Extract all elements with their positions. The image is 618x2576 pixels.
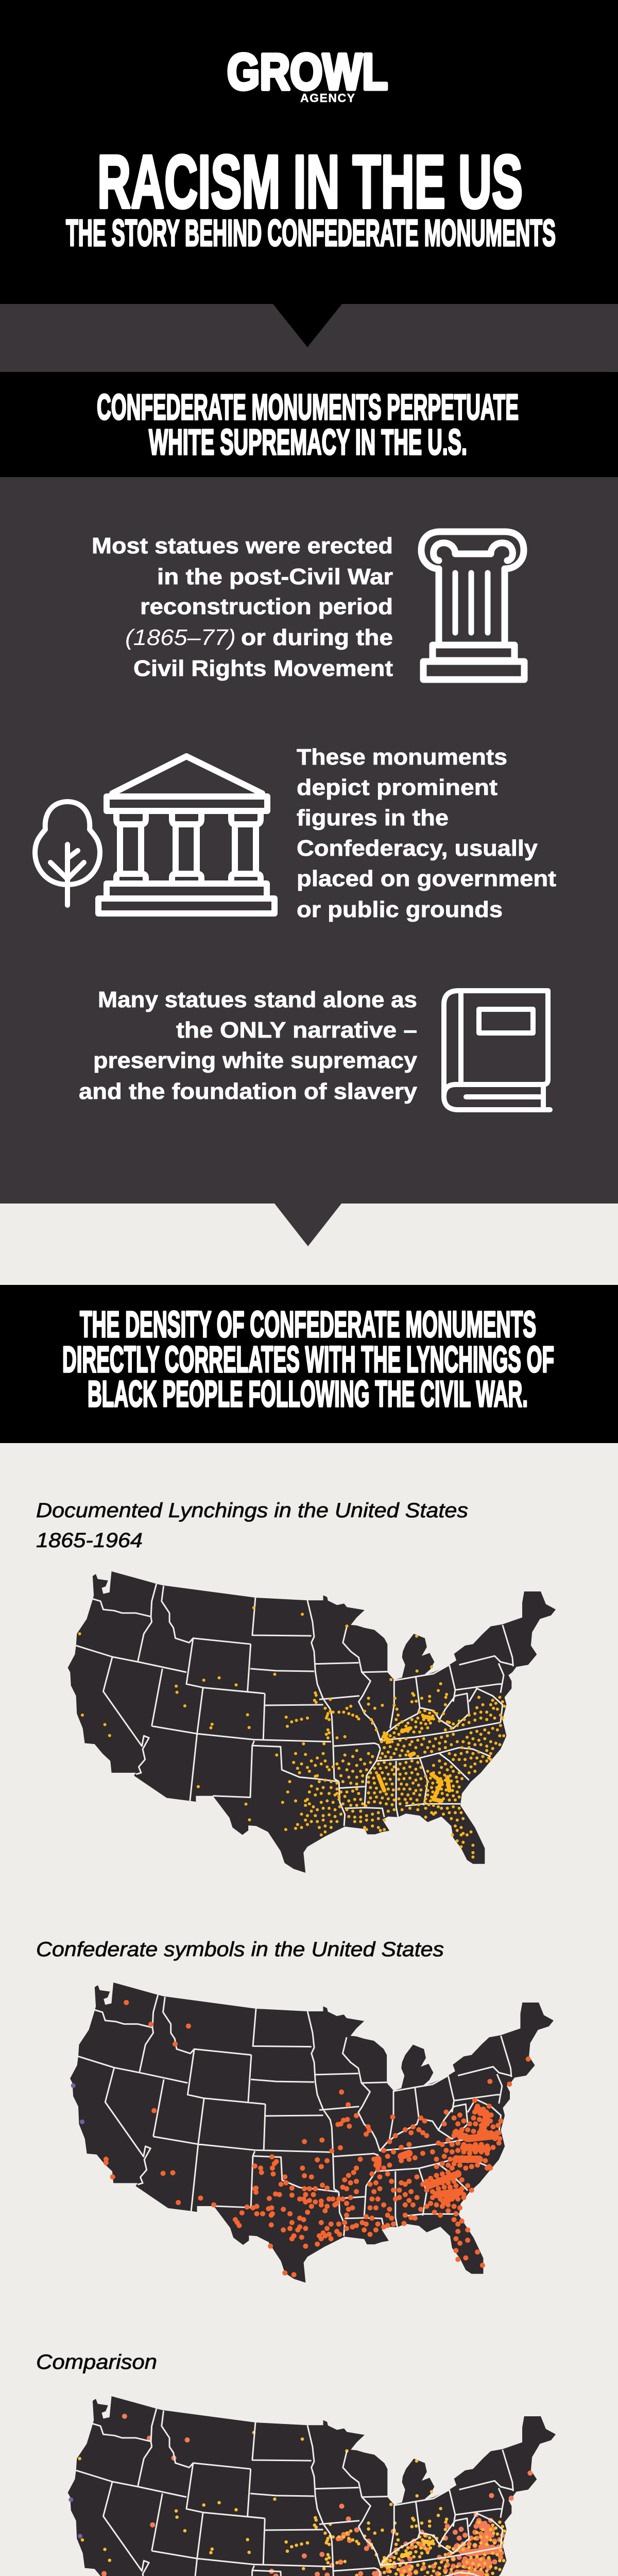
map: confederate symbols <box>70 1982 554 2283</box>
band: grey strip under header <box>0 304 618 372</box>
arrow: header pointer <box>273 304 342 347</box>
text: prominent figures: Confederacy, usually <box>297 836 538 861</box>
text: prominent figures: These monuments <box>297 744 507 770</box>
text: when statues were erected: in the post-Civil War <box>157 564 393 589</box>
text: prominent figures <box>297 744 556 922</box>
caption: lynchings map: 1865-1964 <box>36 1529 143 1552</box>
text: when statues were erected: (1865–77) <box>125 625 236 650</box>
text: prominent figures: or public grounds <box>297 897 503 922</box>
panel: heading, confederate monuments <box>0 372 618 477</box>
panel: header <box>0 0 618 304</box>
text: only narrative <box>79 987 418 1104</box>
logo: Growl Agency: GROWL <box>227 43 388 100</box>
text: prominent figures: figures in the <box>297 805 449 831</box>
logo: Growl Agency: AGENCY <box>300 91 355 105</box>
icon: column <box>421 532 524 680</box>
text: only narrative: the ONLY narrative – <box>176 1018 417 1043</box>
text: when statues were erected: Civil Rights Movement <box>133 656 393 681</box>
heading text <box>97 387 519 462</box>
text: only narrative: and the foundation of slavery <box>79 1079 418 1104</box>
text: when statues were erected: or during the <box>241 625 393 650</box>
icon: temple and tree <box>35 756 274 913</box>
text: prominent figures: depict prominent <box>297 775 497 800</box>
heading text <box>62 1304 554 1415</box>
caption: lynchings map <box>36 1499 468 1552</box>
caption: comparison map: Comparison <box>36 2351 157 2374</box>
caption: lynchings map: Documented Lynchings in the United States <box>36 1499 468 1522</box>
map: comparison <box>68 2396 556 2576</box>
arrow: section pointer <box>274 1204 341 1246</box>
text: only narrative: Many statues stand alone as <box>98 987 417 1012</box>
map: documented lynchings <box>68 1571 556 1873</box>
text: when statues were erected <box>92 533 393 681</box>
panel: density heading <box>0 1285 618 1443</box>
text: prominent figures: placed on government <box>297 866 556 891</box>
text: only narrative: preserving white supremacy <box>93 1048 418 1073</box>
icon: book <box>444 991 550 1110</box>
text: when statues were erected: reconstruction period <box>140 594 393 619</box>
caption: confederate symbols map: Confederate symbols in the United States <box>36 1938 444 1961</box>
panel: facts about monuments <box>0 477 618 1204</box>
text: when statues were erected: Most statues were erected <box>92 533 393 558</box>
